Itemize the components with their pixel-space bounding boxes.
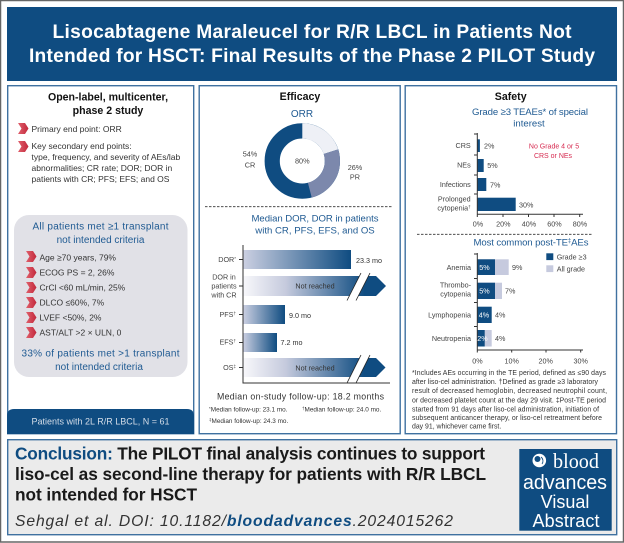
bar chart: post-TE AEs: 5% (479, 286, 490, 296)
bar chart: time-to-event medians: DOR in (212, 272, 236, 282)
efficacy footnotes: ‡ (209, 417, 212, 422)
safety footnotes: started from 91 days after liso-cel administration, initiation of (412, 406, 599, 414)
bar chart: grade 3 TEAEs: 60% (547, 220, 562, 229)
heading: study design: Open-label, multicenter, (48, 92, 168, 104)
end points list: abnormalities; CR rate; DOR; DOR in (32, 163, 173, 173)
criteria list: ECOG PS = 2, 26% (40, 268, 115, 278)
bar chart: grade 3 TEAEs: 7% (490, 180, 501, 190)
bar chart: post-TE AEs: 10% (505, 356, 519, 365)
bar chart: time-to-event medians: ‡ (233, 364, 236, 369)
heading: efficacy: Efficacy (280, 91, 320, 103)
subheading: median DOR: Median DOR, DOR in patients (252, 214, 379, 225)
subheading: TEAEs (472, 107, 588, 130)
bar chart: grade 3 TEAEs: 80% (573, 220, 588, 229)
callout: no grade 4 or 5 (529, 144, 579, 160)
logo: blood advances visual abstract: blood (553, 449, 599, 473)
panel: safety (405, 86, 616, 434)
bar chart: grade 3 TEAEs: 40% (522, 220, 537, 229)
efficacy footnotes: * (209, 406, 211, 411)
bar chart: grade 3 TEAEs: cytopenia (437, 204, 468, 213)
conclusion text: Conclusion: The PILOT final analysis continues to support (15, 443, 485, 463)
logo: blood advances visual abstract: Visual (541, 492, 589, 512)
subheading: ORR: ORR (291, 109, 313, 120)
safety footnotes: result of decreased hemoglobin, decreased neutrophil count, (412, 388, 607, 395)
bar chart: time-to-event medians: † (233, 338, 236, 344)
bar chart: grade 3 TEAEs: 2% (484, 142, 495, 150)
bar chart: grade 3 TEAEs: 0% (473, 220, 484, 229)
heading: safety: Safety (495, 91, 527, 103)
conclusion text: liso-cel as second-line therapy for patients with R/R LBCL (15, 464, 486, 484)
title banner: Intended for HSCT: Final Results of the Phase 2 PILOT Study (29, 46, 595, 67)
criteria summary: not intended criteria (55, 362, 143, 373)
subheading: TEAEs: interest (513, 119, 545, 130)
patient count bar (7, 409, 194, 434)
patient count bar: Patients with 2L R/R LBCL, N = 61 (32, 416, 170, 426)
bar chart: post-TE AEs: Thrombo- (440, 281, 472, 290)
bar chart: post-TE AEs: 20% (539, 356, 553, 365)
bar chart: grade 3 TEAEs: 20% (496, 220, 511, 229)
bar chart: time-to-event medians: DOR (218, 255, 234, 264)
logo: blood advances visual abstract (519, 449, 612, 531)
bar chart: time-to-event medians: Not reached (295, 364, 335, 373)
efficacy footnotes (209, 406, 381, 425)
panel: conclusion (8, 440, 617, 535)
bar chart: post-TE AEs: cytopenia (440, 290, 471, 299)
bar chart: grade 3 TEAEs: Prolonged (438, 195, 471, 204)
bar chart: time-to-event medians: 9.0 mo (289, 311, 311, 320)
logo: blood advances visual abstract: advances (523, 472, 607, 494)
criteria list: DLCO ≤60%, 7% (40, 298, 105, 308)
criteria list: LVEF <50%, 2% (40, 312, 102, 322)
bar chart: grade 3 TEAEs (437, 133, 588, 229)
panel: study design (7, 86, 194, 434)
criteria heading: All patients met ≥1 transplant (32, 222, 169, 232)
donut chart: ORR: 80% (295, 156, 310, 166)
subheading: TEAEs: Grade ≥3 TEAEs* of special (472, 107, 588, 118)
bar chart: time-to-event medians: EFS (220, 338, 233, 346)
end points list: Primary end point: ORR (32, 124, 122, 134)
subheading: post-TE AEs: Most common post-TE (474, 238, 568, 249)
title banner: Lisocabtagene Maraleucel for R/R LBCL in Patients Not (52, 22, 572, 43)
follow-up summary: Median on-study follow-up: 18.2 months (217, 392, 385, 402)
legend: grade: Grade ≥3 (557, 252, 587, 262)
title banner (7, 7, 617, 81)
heading: study design: phase 2 study (73, 105, 143, 117)
subheading: post-TE AEs: AEs (571, 238, 589, 249)
bar chart: grade 3 TEAEs: † (468, 205, 471, 210)
donut chart: ORR: CR (245, 160, 255, 170)
criteria summary (22, 348, 180, 373)
bar chart: post-TE AEs: Neutropenia (432, 334, 471, 343)
donut chart: ORR: 26% (348, 163, 363, 172)
bar chart: time-to-event medians: OS (223, 363, 233, 372)
bar chart: time-to-event medians: † (233, 311, 236, 316)
bar chart: post-TE AEs: 30% (574, 356, 588, 365)
efficacy footnotes: Median follow-up: 23.1 mo. (211, 406, 288, 413)
panel: efficacy (199, 86, 400, 434)
legend: grade: All grade (557, 264, 585, 274)
end points list: patients with CR; PFS; EFS; and OS (32, 174, 170, 184)
criteria heading (32, 222, 169, 246)
end points list (18, 123, 180, 184)
criteria list (26, 251, 126, 338)
icon: blood cell (532, 454, 546, 467)
bar chart: grade 3 TEAEs: Infections (440, 180, 471, 189)
conclusion text (15, 443, 486, 504)
criteria list: CrCl <60 mL/min, 25% (40, 282, 126, 292)
bar chart: post-TE AEs: Anemia (447, 263, 471, 272)
efficacy footnotes: Median follow-up: 24.0 mo. (305, 406, 381, 413)
end points list: Key secondary end points: (32, 141, 132, 151)
bar chart: post-TE AEs (428, 253, 588, 365)
bar chart: time-to-event medians: 7.2 mo (280, 338, 302, 347)
subheading: post-TE AEs: ‡ (568, 239, 571, 245)
safety footnotes: after liso-cel administration. †Defined as grade ≥3 laboratory (412, 379, 599, 386)
criteria list: Age ≥70 years, 79% (40, 252, 116, 262)
bar chart: time-to-event medians: with CR (210, 290, 237, 300)
bar chart: grade 3 TEAEs: 5% (487, 161, 498, 170)
bar chart: time-to-event medians: Not reached (295, 282, 335, 291)
subheading: median DOR (252, 214, 379, 237)
criteria heading: not intended criteria (57, 235, 145, 246)
bar chart: time-to-event medians: 23.3 mo (356, 256, 382, 265)
safety footnotes: or decreased platelet count at the day 29 visit. ‡Post-TE period (412, 398, 606, 404)
safety footnotes: *Includes AEs occurring in the TE period, defined as ≤90 days (412, 370, 607, 377)
bar chart: grade 3 TEAEs: 30% (519, 200, 534, 210)
bar chart: post-TE AEs: 9% (512, 263, 523, 272)
end points list: type, frequency, and severity of AEs/lab (32, 152, 180, 162)
bar chart: post-TE AEs: 4% (495, 334, 506, 343)
legend: grade (546, 252, 587, 274)
bar chart: time-to-event medians: PFS (220, 310, 233, 319)
bar chart: post-TE AEs: Lymphopenia (428, 311, 471, 320)
efficacy footnotes: Median follow-up: 24.3 mo. (212, 418, 288, 425)
donut chart: ORR: 54% (243, 150, 258, 158)
bar chart: post-TE AEs: 0% (472, 356, 483, 365)
callout: no grade 4 or 5: No Grade 4 or 5 (529, 144, 579, 150)
safety footnotes (412, 370, 607, 430)
efficacy footnotes: † (302, 406, 305, 411)
criteria list: AST/ALT >2 × ULN, 0 (40, 328, 122, 338)
logo: blood advances visual abstract: Abstract (532, 511, 600, 531)
criteria summary: 33% of patients met >1 transplant (22, 348, 180, 360)
safety footnotes: subsequent anticancer therapy, or liso-cel retreatment before (412, 415, 602, 422)
criteria box (14, 215, 188, 377)
bar chart: post-TE AEs: 5% (479, 263, 490, 272)
donut chart: ORR (243, 123, 363, 198)
bar chart: time-to-event medians: * (234, 256, 236, 261)
conclusion text: not intended for HSCT (15, 484, 197, 504)
bar chart: post-TE AEs: 4% (479, 311, 490, 320)
bar chart: grade 3 TEAEs: NEs (457, 160, 471, 170)
bar chart: time-to-event medians: patients (211, 282, 237, 290)
bar chart: grade 3 TEAEs: CRS (456, 141, 471, 150)
bar chart: post-TE AEs: 4% (495, 311, 506, 320)
donut chart: ORR: PR (350, 172, 360, 182)
callout: no grade 4 or 5: CRS or NEs (534, 153, 573, 160)
bar chart: post-TE AEs: 7% (505, 286, 516, 296)
citation: Sehgal et al. DOI: 10.1182/bloodadvances.2024015262 (15, 513, 453, 530)
subheading: median DOR: with CR, PFS, EFS, and OS (254, 226, 375, 237)
bar chart: post-TE AEs: 2% (477, 334, 488, 343)
safety footnotes: day 91, whichever came first. (412, 424, 501, 430)
bar chart: time-to-event medians (210, 245, 390, 384)
heading: study design (48, 92, 168, 117)
